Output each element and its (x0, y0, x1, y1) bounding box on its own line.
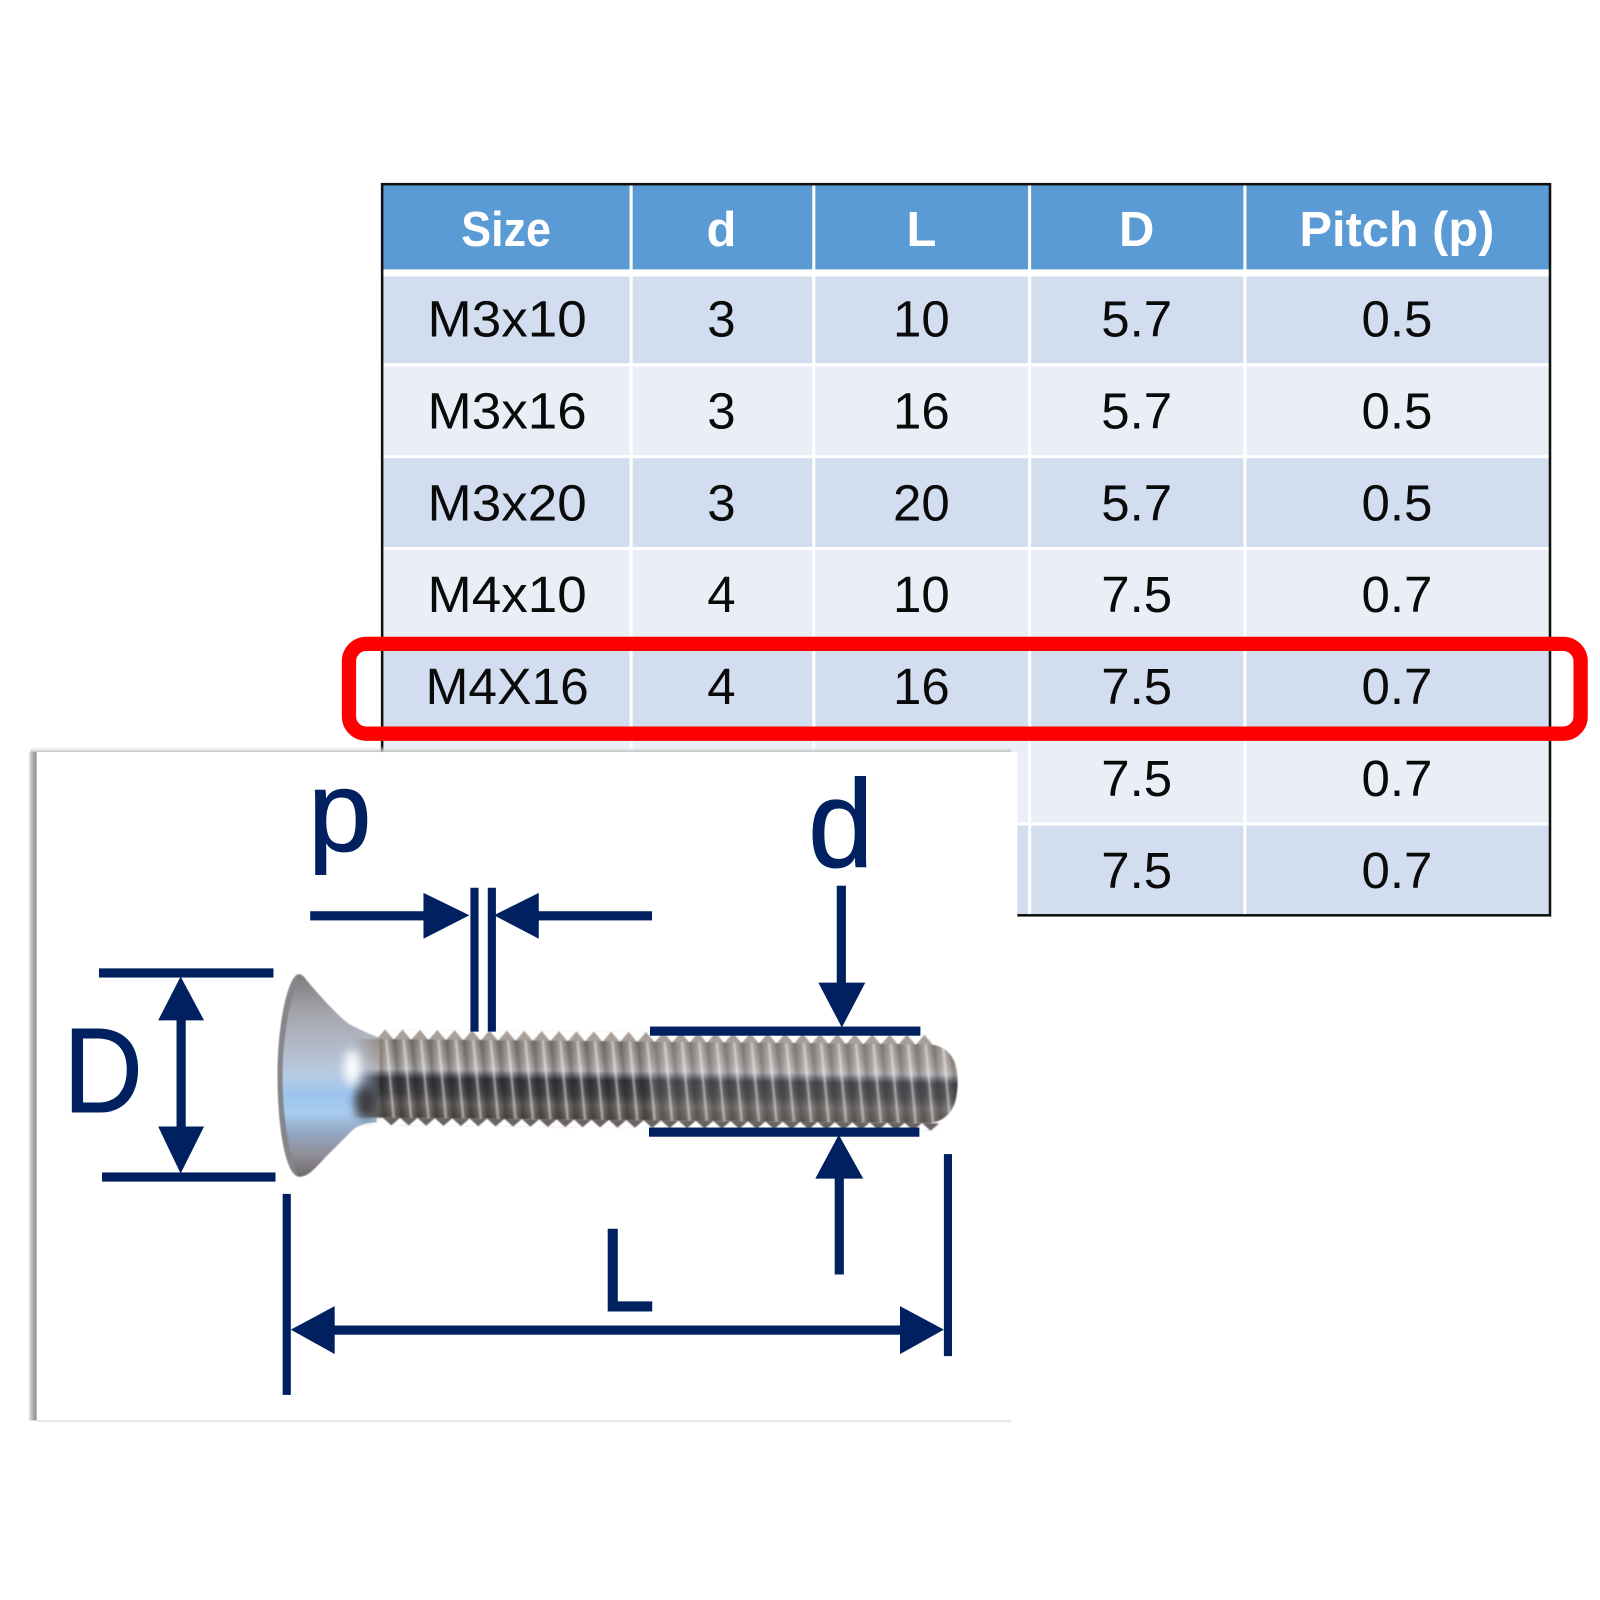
table header row: D (1119, 203, 1154, 257)
table body rows: 10 (893, 291, 950, 348)
dimension L (283, 1154, 952, 1395)
table body rows: 7.5 (1101, 566, 1172, 623)
size table (382, 184, 1550, 915)
screw head (278, 974, 380, 1177)
table body rows (383, 185, 1550, 914)
table body rows: M3x10 (428, 291, 587, 348)
head highlight (344, 1050, 360, 1085)
table body rows: 3 (707, 383, 736, 440)
threaded shaft (352, 1029, 958, 1131)
table body rows: 4 (707, 658, 736, 715)
diagram panel (29, 746, 1017, 1423)
dimension p (308, 749, 652, 1032)
dimension D (63, 968, 276, 1182)
table header row (383, 185, 1550, 269)
table body rows: 7.5 (1101, 842, 1172, 899)
table body rows: 0.7 (1361, 842, 1432, 899)
table header row: Pitch (p) (1299, 203, 1494, 257)
table body rows: 7.5 (1101, 750, 1172, 807)
table header row: d (706, 203, 736, 257)
table body rows: M3x20 (428, 474, 587, 531)
table body rows: 5.7 (1101, 291, 1172, 348)
table body rows: 3 (707, 291, 736, 348)
table body rows: 0.5 (1361, 383, 1432, 440)
table body rows: 0.7 (1361, 750, 1432, 807)
table body rows: 16 (893, 658, 950, 715)
table border (382, 184, 1550, 915)
screw photo illustration (278, 974, 958, 1177)
table header row: L (906, 203, 936, 257)
table body rows: 7.5 (1101, 658, 1172, 715)
table body rows: 0.5 (1361, 474, 1432, 531)
dimension d: d (808, 754, 873, 893)
table body rows: 3 (707, 474, 736, 531)
dimension d (649, 754, 920, 1274)
dimension D: D (63, 1003, 143, 1138)
table body rows: 20 (893, 474, 950, 531)
table body rows: 0.7 (1361, 658, 1432, 715)
neck shading (355, 1086, 378, 1118)
table body rows: 0.5 (1361, 291, 1432, 348)
table body rows: M4x10 (428, 566, 587, 623)
table body rows: 10 (893, 566, 950, 623)
dimension p: p (308, 749, 372, 876)
table body rows: M3x16 (428, 383, 587, 440)
table body rows: 16 (893, 383, 950, 440)
table body rows: 5.7 (1101, 383, 1172, 440)
dimension L: L (600, 1205, 655, 1337)
table header row: Size (461, 203, 551, 257)
table body rows: 5.7 (1101, 474, 1172, 531)
table body rows: 0.7 (1361, 566, 1432, 623)
table body rows: 4 (707, 566, 736, 623)
red highlight around M4X16 row (349, 644, 1581, 734)
table body rows: M4X16 (426, 658, 589, 715)
